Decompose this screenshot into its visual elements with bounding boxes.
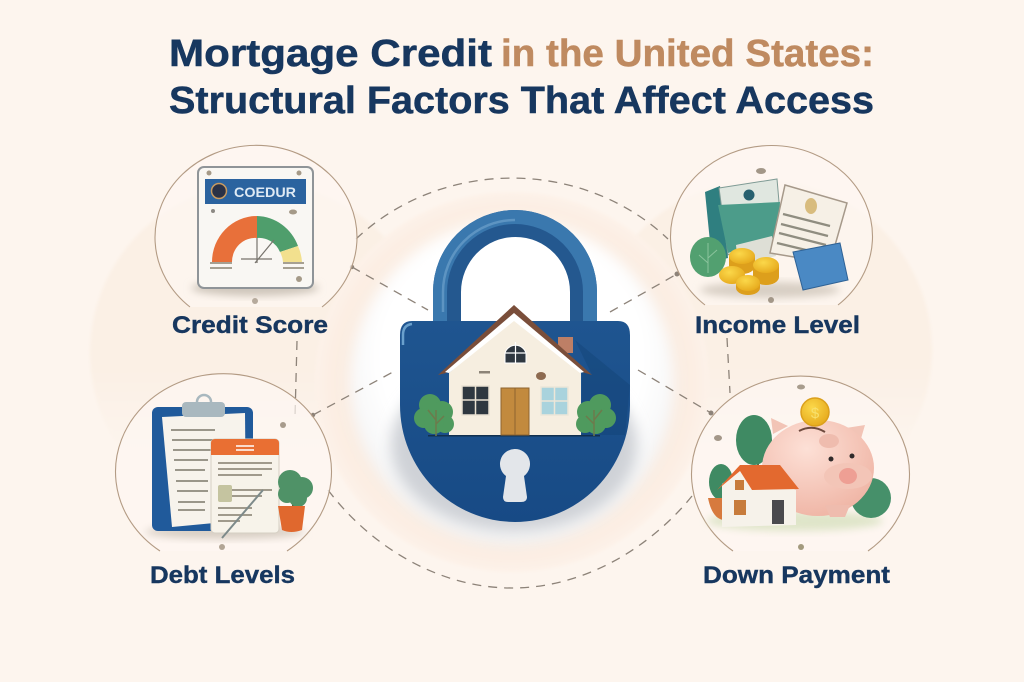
- label: credit score: Credit Score: [172, 312, 328, 339]
- label: debt levels: Debt Levels: [150, 562, 295, 589]
- icon: clipboard, bill and plant: [145, 395, 313, 539]
- panel: debt levels: [116, 374, 332, 589]
- house: [414, 305, 616, 436]
- icon: credit score gauge card: [191, 167, 319, 296]
- coin stacks: [719, 248, 779, 295]
- shackle: [433, 210, 597, 322]
- tree left: [414, 394, 454, 436]
- panel: down payment: [692, 376, 909, 589]
- icon: central padlock with house: [391, 210, 637, 531]
- icon: piggy bank and house: [707, 398, 891, 531]
- keyhole: [500, 449, 530, 502]
- title: in the United States:: [501, 33, 874, 75]
- icon: income documents and coins: [690, 179, 848, 298]
- panel: credit score: [155, 145, 357, 339]
- panel: income level: [670, 146, 872, 339]
- lock body: [400, 321, 630, 522]
- title: Structural Factors That Affect Access: [169, 80, 874, 122]
- connector nodes: [311, 265, 714, 417]
- label: down payment: Down Payment: [703, 562, 890, 589]
- icon: piggy bank and house: $: [811, 405, 820, 422]
- label: income level: Income Level: [695, 312, 860, 339]
- icon: credit score gauge card: COEDUR: [234, 184, 296, 200]
- title: Mortgage Credit: [169, 33, 492, 75]
- title: [169, 33, 874, 122]
- dashed connectors: [295, 178, 730, 588]
- tree right: [576, 394, 616, 436]
